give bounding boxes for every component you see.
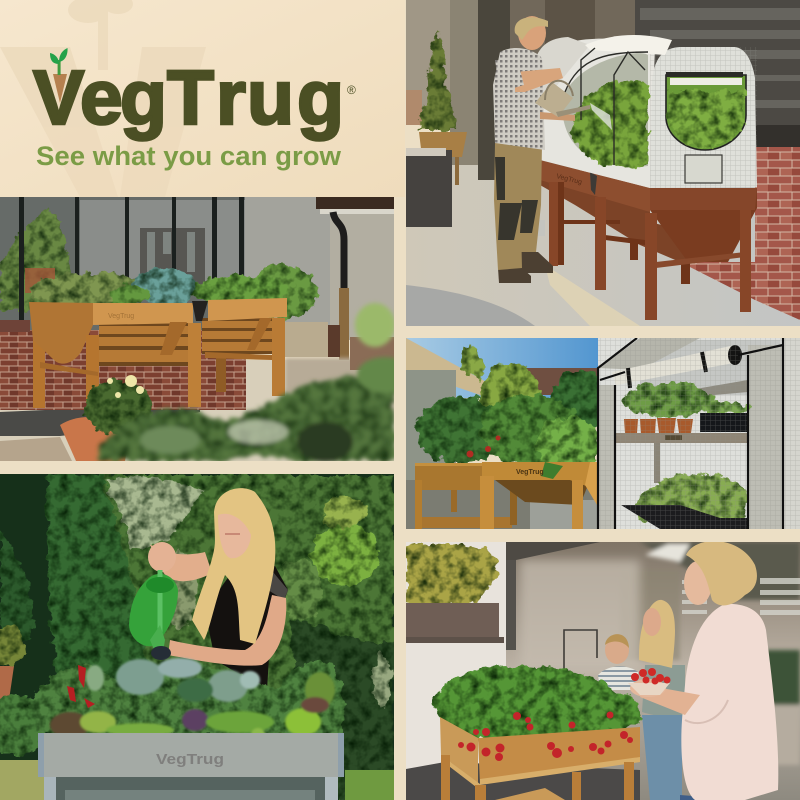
cushion behind [530,220,545,236]
tomatoes [466,436,500,458]
decking [406,762,640,800]
side window with plants [562,53,648,167]
bamboo [406,543,498,605]
panel: photo of family with strawberry planter [406,541,800,800]
dark garden background [0,474,394,800]
wall planter [406,603,504,643]
front window with plants [666,75,746,150]
raised arm [150,545,212,581]
registered mark: ® [347,83,356,97]
face [218,514,251,558]
shirt [493,48,545,150]
icon: sprout in soil wedge [50,48,68,103]
terracotta pot [60,417,130,461]
panel: photo of planters and growhouse [406,338,800,529]
seed trays [621,505,748,529]
outside trees [620,542,800,765]
conifer hedge [47,474,150,680]
ground paving [406,150,800,326]
boy [598,634,638,690]
tagline: See what you can grow [36,141,342,171]
sky [406,338,606,398]
strawberries [458,712,633,761]
downpipe and post [333,212,349,388]
small vent flap [685,155,722,183]
flowering plant [84,375,152,434]
logo wordmark: VegTrug [33,55,344,141]
bowl of strawberries [628,668,670,695]
timber wall left [406,0,450,112]
boots [498,252,553,283]
arm [515,68,563,92]
green watering can [129,570,178,660]
girl [639,600,685,800]
hair [686,541,757,605]
terracotta pot and shrub [0,625,25,706]
garden foliage [416,345,608,473]
grey painted planter [38,733,344,800]
top [205,566,288,690]
glass background [506,542,800,800]
man watering [493,16,612,283]
low shrubs and grass [0,695,394,800]
low retaining wall [284,322,340,357]
black tray on shelf [700,413,748,432]
hair [192,488,275,644]
brick wall [0,330,246,410]
cloche cover [535,35,757,188]
woman [630,541,778,800]
planter logo: VegTrug [156,751,224,768]
planter logo: VegTrug [516,469,544,476]
door frame [506,560,516,650]
planter logo: VegTrug [556,173,583,186]
plants behind glass [0,210,72,310]
hair [515,17,548,40]
terracotta pots [624,418,693,433]
window reflection frame [564,630,597,671]
topiary planter [419,132,467,185]
greenhouse glass [0,197,245,337]
trousers [494,143,542,270]
panel: photo of woman watering vegetables [0,474,394,800]
forearm [640,685,700,715]
logo on planter: VegTrug [108,313,134,320]
dark cladding [635,0,800,150]
roof eaves [316,197,394,214]
right tree foliage [105,474,394,800]
planter body [540,160,757,320]
foliage on planter [30,265,317,319]
dark lower foliage [290,620,394,800]
brick wall [680,147,800,320]
topiary [418,28,457,130]
seedlings on shelf [623,383,750,417]
panel: logo on wood background [0,0,405,197]
panel: photo of man watering covered planter [406,0,800,326]
paving [406,480,598,529]
ground [0,360,394,461]
rendered wall [245,197,330,325]
watermark: faint V and sprout [0,0,206,148]
blurred foreground foliage [95,303,413,462]
white wall left [406,542,506,774]
house eaves left [406,338,492,399]
vegetables in planter [30,658,345,746]
right raised bed [350,337,394,370]
lower arm [168,595,286,666]
top frame [506,542,600,560]
growhouse cover edges [598,338,800,529]
strawberry foliage [433,665,642,745]
mesh overlay [598,338,800,529]
planters [415,462,597,529]
wooden planter [440,717,640,800]
rattan box [406,148,452,227]
woman [148,488,288,690]
wooden planter [29,298,287,408]
head [518,16,546,50]
brown roof [490,368,602,395]
glazing bars [19,197,244,320]
shelf [615,433,748,443]
watering can [535,81,612,130]
face [684,561,712,605]
pale foliage highlights [105,476,391,708]
panel: photo of wooden planter at greenhouse [0,197,413,462]
white roller tube [612,345,742,388]
shelf post [654,443,660,483]
back legs of planter [630,243,690,284]
lower seedlings [635,472,748,520]
forearm lower [540,112,575,121]
left foliage [0,530,33,640]
blinds reflection [682,578,800,615]
lighter wall [520,560,640,670]
black zip edges [598,338,783,529]
growhouse interior [598,338,800,529]
